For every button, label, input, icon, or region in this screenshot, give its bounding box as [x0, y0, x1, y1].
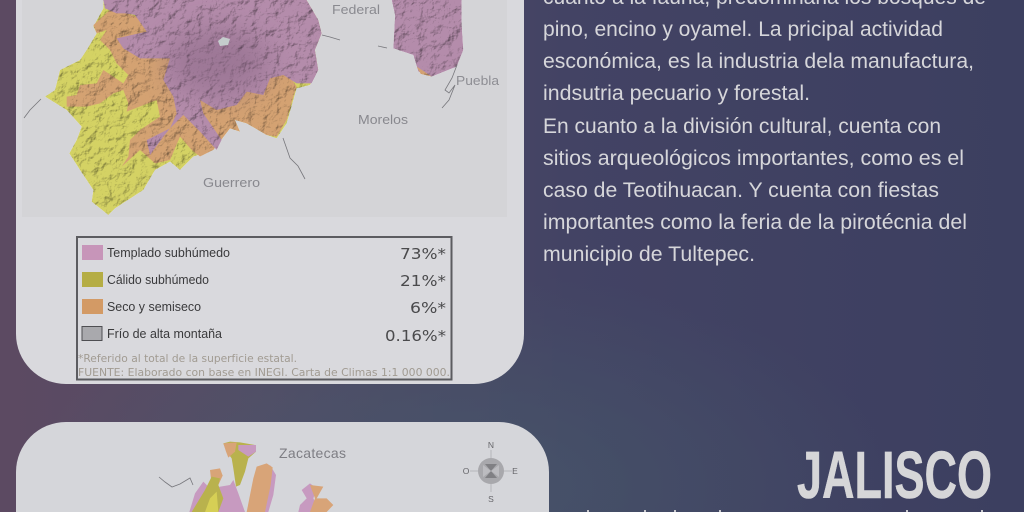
legend item: Seco y semiseco: 6%* [410, 299, 447, 317]
text block: Estado de México description: importantes como la feria de la pirotécnia del [543, 210, 967, 234]
legend item: Seco y semiseco: Seco y semiseco [107, 300, 201, 314]
icon: compass: O [463, 466, 470, 476]
text block: Estado de México description: municipio de Tultepec. [543, 242, 755, 266]
text block: Estado de México description: esconómica, es la industria dela manufactura, [543, 49, 974, 73]
legend item: Templado subhúmedo: 73%* [400, 245, 447, 263]
legend item: Seco y semiseco [82, 299, 447, 317]
legend item: Frío de alta montaña [82, 326, 447, 345]
text block: Estado de México description: En cuanto a la división cultural, cuenta con [543, 114, 941, 138]
label: Puebla: Puebla [456, 73, 500, 88]
icon: compass: E [512, 466, 518, 476]
label: Morelos: Morelos [358, 112, 409, 127]
icon: compass [463, 440, 518, 504]
label: Federal: Federal [332, 2, 380, 17]
icon: compass: N [488, 440, 494, 450]
legend item: Frío de alta montaña: 0.16%* [385, 327, 447, 345]
text block: Estado de México description: pino, encino y oyamel. La pricipal actividad [543, 17, 943, 41]
map: Jalisco climate regions [189, 442, 333, 512]
legend [77, 237, 452, 380]
text block: Estado de México description [543, 0, 986, 266]
label: Zacatecas: Zacatecas [279, 445, 346, 461]
icon: volcano peak [218, 37, 230, 46]
legend item: Templado subhúmedo: Templado subhúmedo [107, 246, 230, 260]
legend item: Frío de alta montaña: Frío de alta montaña [107, 327, 222, 341]
legend item: Cálido subhúmedo [82, 272, 447, 290]
label: Guerrero: Guerrero [203, 175, 260, 190]
map: borders and rivers [24, 35, 457, 179]
legend item: Cálido subhúmedo: Cálido subhúmedo [107, 273, 209, 287]
text block: Estado de México description: caso de Teotihuacan. Y cuenta con fiestas [543, 178, 939, 202]
panel: Estado de México climate map [16, 0, 524, 384]
icon: compass: S [488, 494, 494, 504]
text block: Estado de México description: indsutria pecuario y forestal. [543, 81, 810, 105]
map: Jalisco border line [159, 477, 193, 487]
legend source: FUENTE: Elaborado con base en INEGI. Carta de Climas 1:1 000 000. [78, 367, 450, 379]
map: mountain shading [166, 28, 270, 96]
panel: Jalisco climate map [16, 422, 549, 512]
legend item: Templado subhúmedo [82, 245, 447, 263]
map: climate regions [45, 0, 463, 215]
legend item: Cálido subhúmedo: 21%* [400, 272, 447, 290]
legend footnote: *Referido al total de la superficie estatal. [78, 353, 297, 365]
text block: Estado de México description: sitios arqueológicos importantes, como es el [543, 146, 964, 170]
